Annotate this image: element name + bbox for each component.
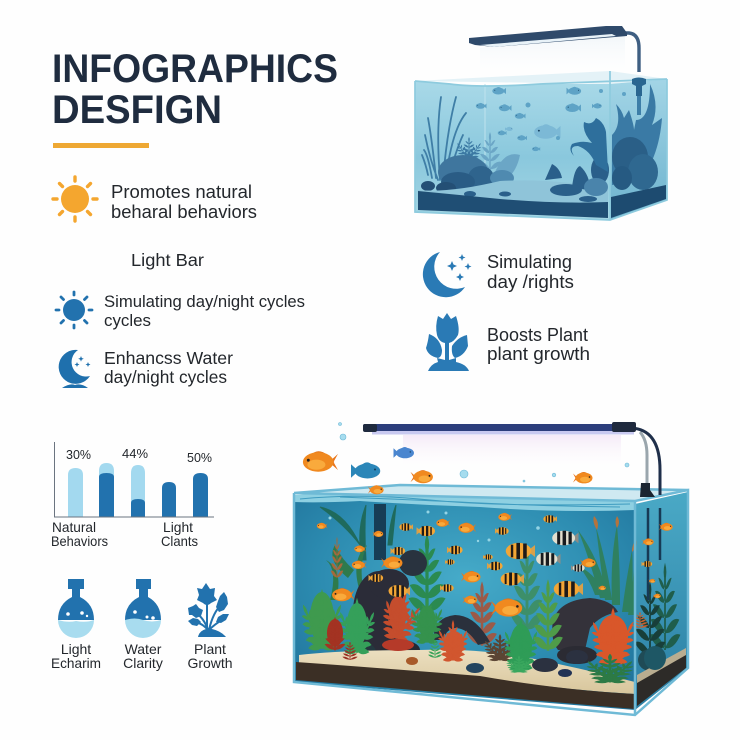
text: boosts plant growth: Boosts Plant <box>487 324 588 345</box>
glow under top lamp <box>480 36 625 78</box>
top lamp arm <box>624 33 639 72</box>
lamp clamp <box>640 483 655 497</box>
water plant bubbles <box>328 510 540 542</box>
text: simulating day/night cycles <box>104 292 305 330</box>
front substrate <box>418 191 608 218</box>
right rock arch <box>552 598 618 664</box>
icon: blue sun <box>56 292 92 328</box>
icon: orange sun <box>53 177 97 221</box>
tank front water <box>294 498 635 710</box>
chart axes <box>54 442 214 517</box>
surface ripples <box>300 496 630 507</box>
dark bar 4 <box>162 482 176 517</box>
value labels: 44% <box>122 446 148 461</box>
labels: flask and plant icons: Water <box>125 641 162 657</box>
lamp clamp <box>632 78 646 96</box>
lamp arm silver <box>640 432 647 485</box>
text: enhancss water: Enhancss Water <box>104 348 233 368</box>
red corals left <box>325 588 474 665</box>
blue fish school <box>476 87 626 151</box>
value labels <box>66 446 212 465</box>
tank side pane <box>610 79 667 220</box>
title: INFOGRAPHICS <box>52 47 338 91</box>
tall reeds right <box>578 516 636 615</box>
icon: flask light echarim <box>58 579 94 638</box>
fish inside tank <box>317 513 673 617</box>
value labels: 30% <box>66 447 91 462</box>
illustration: bottom colourful aquarium <box>294 422 688 715</box>
tank top opening <box>294 485 688 501</box>
dark column and tall left leaves <box>320 504 396 600</box>
text: promotes natural behaviors: Promotes natural <box>111 181 252 202</box>
title accent bar <box>53 143 149 148</box>
dark coral right <box>570 118 608 172</box>
text: promotes natural behaviors: beharal behaviors <box>111 201 257 222</box>
green plant centre <box>497 581 562 674</box>
stacked bar 2 <box>99 463 114 517</box>
axis labels: Clants <box>161 533 198 549</box>
text: enhancss water <box>104 348 233 387</box>
side pane plants and rocks <box>612 84 662 190</box>
labels: flask and plant icons: Plant <box>194 641 226 657</box>
green bush left <box>294 590 382 659</box>
mid-ground pale plants <box>477 132 520 178</box>
air bubbles <box>338 422 629 482</box>
labels: flask and plant icons: Light <box>61 641 91 657</box>
text: simulating day/night cycles: cycles <box>104 311 151 330</box>
axis labels <box>51 519 198 549</box>
title: DESFIGN <box>52 88 222 132</box>
brown leaf tuft <box>478 635 522 663</box>
side pane plants <box>635 508 680 671</box>
fish above water <box>303 447 592 494</box>
dark rock mound left <box>353 550 427 660</box>
text: boosts plant growth <box>487 324 590 364</box>
substrate front <box>296 662 635 709</box>
icon: plant with three leaves <box>426 313 469 371</box>
icon: crescent moon with waves <box>59 350 90 388</box>
labels: flask and plant icons <box>51 641 233 671</box>
text: promotes natural behaviors <box>111 181 257 222</box>
green bush centre left <box>405 598 449 658</box>
illustration: top monochrome aquarium <box>415 26 667 220</box>
dark pebbles <box>406 650 588 677</box>
text: simulating day rights: day /rights <box>487 271 574 292</box>
bottom light bar <box>363 422 636 434</box>
dark bar 5 <box>193 473 208 517</box>
labels: flask and plant icons: Growth <box>187 655 233 671</box>
text: enhancss water: day/night cycles <box>104 367 227 387</box>
sand and substrate side <box>637 646 686 706</box>
faded background plants <box>410 536 542 645</box>
centre and right rocks <box>464 156 609 202</box>
sand front wedge <box>299 650 635 694</box>
axis labels: Behaviors <box>51 533 108 549</box>
back wall line <box>484 84 486 172</box>
green tuft bottom right <box>577 654 643 686</box>
dark rock arch centre <box>434 615 490 645</box>
icon: flask water clarity <box>125 579 161 638</box>
water surface band <box>294 493 635 511</box>
orange fern right <box>583 609 648 669</box>
chart: light impact bars <box>51 442 214 549</box>
text: simulating day rights <box>487 251 574 292</box>
stacked bar 3 <box>131 465 145 517</box>
tank side pane water <box>635 492 688 710</box>
dark rocks left <box>421 137 514 194</box>
axis labels: Light <box>163 519 193 535</box>
title <box>52 47 338 132</box>
tank front pane <box>415 81 610 220</box>
sand bed <box>418 180 608 203</box>
text: simulating day rights: Simulating <box>487 251 572 272</box>
text: simulating day/night cycles: Simulating day/night cycles <box>104 292 305 311</box>
value labels: 50% <box>187 450 212 465</box>
light bar 1 <box>68 468 83 517</box>
side pane substrate <box>611 185 666 218</box>
top light bar <box>469 26 627 47</box>
tank glass frame <box>294 485 688 715</box>
aquatic grass left <box>422 97 466 180</box>
labels: flask and plant icons: Echarim <box>51 655 101 671</box>
lamp arm dark <box>632 428 660 495</box>
text: boosts plant growth: plant growth <box>487 343 590 364</box>
pink lamp glow <box>403 435 621 471</box>
icon: large crescent moon with stars <box>423 252 472 297</box>
icon: leafy plant <box>188 583 229 637</box>
labels: flask and plant icons: Clarity <box>123 655 163 671</box>
lamp mounting pole <box>637 78 641 115</box>
label: light bar: Light Bar <box>131 250 204 270</box>
axis labels: Natural <box>52 519 96 535</box>
tank glass frame <box>415 71 667 220</box>
tank top surface <box>415 71 667 84</box>
